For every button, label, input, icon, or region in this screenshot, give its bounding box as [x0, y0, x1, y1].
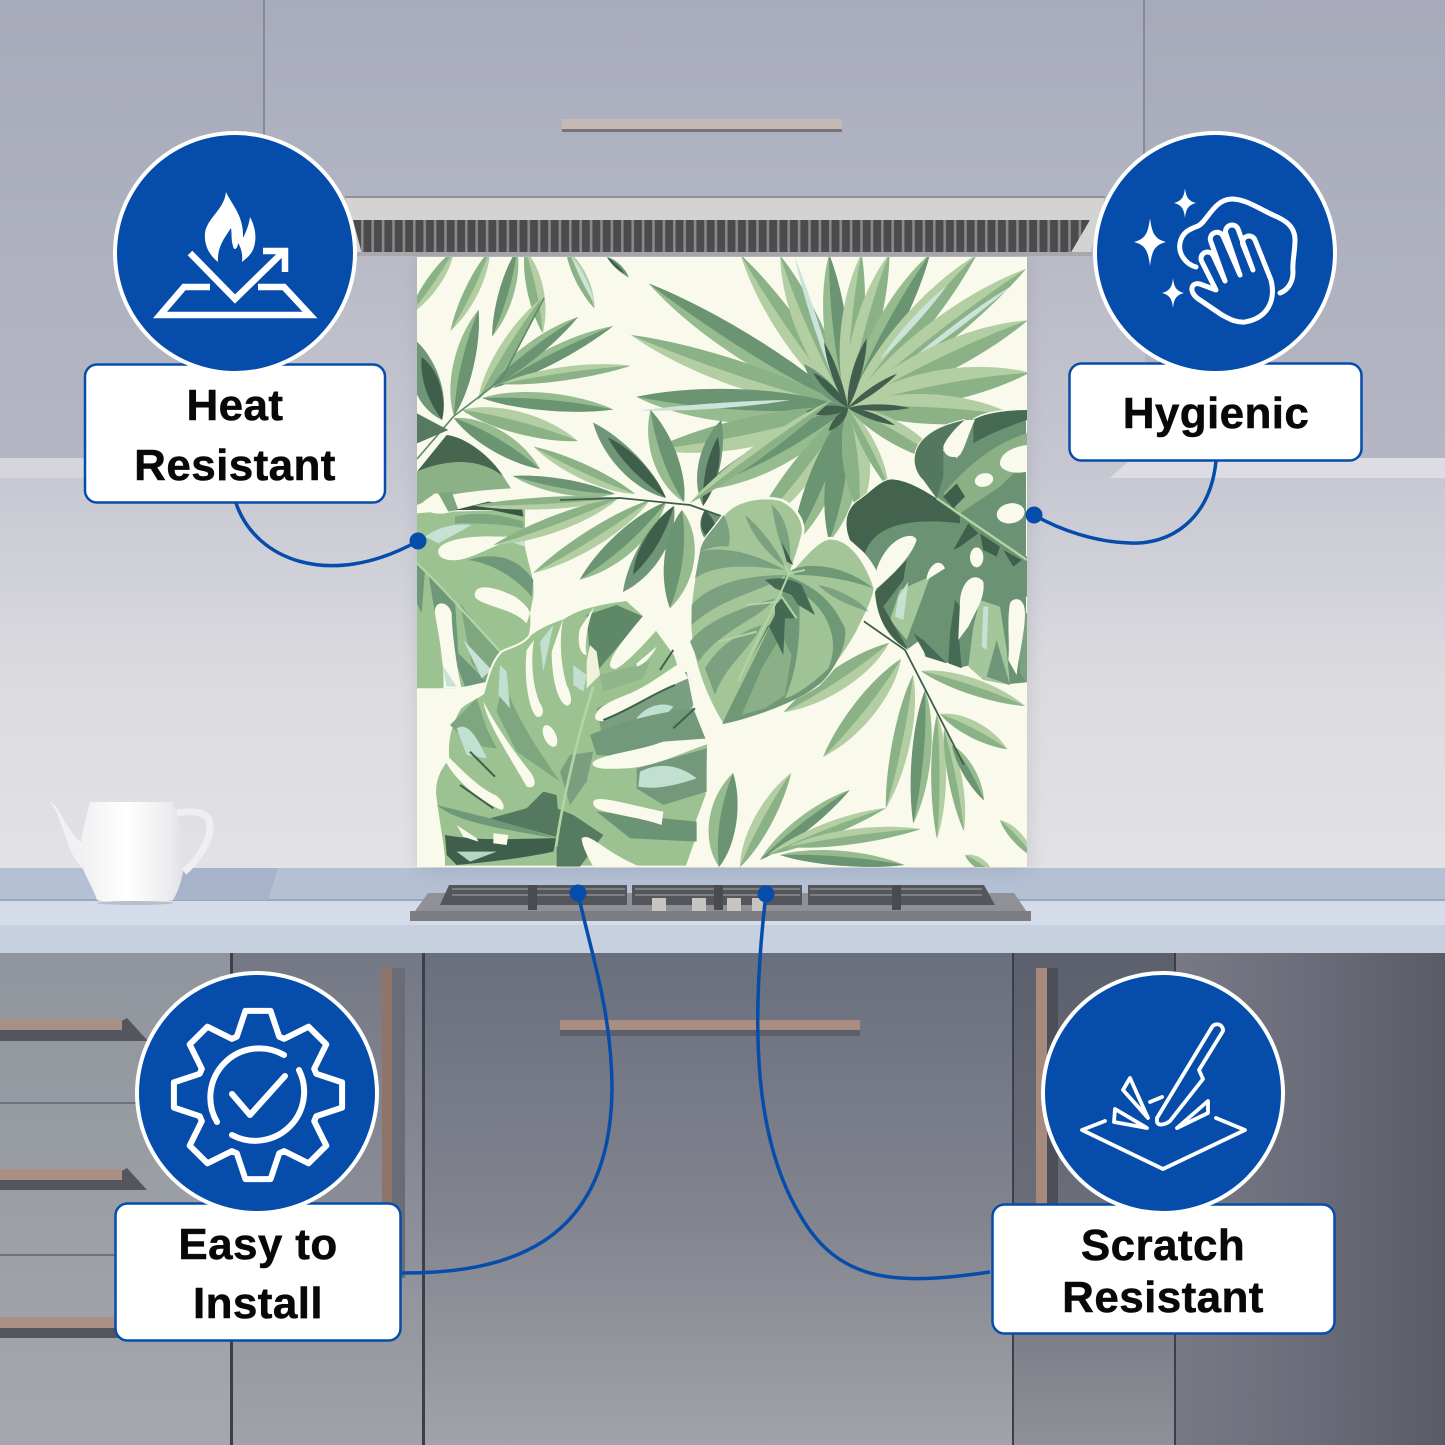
label: hygienic: Hygienic	[1123, 389, 1309, 438]
extractor hood	[345, 197, 1105, 255]
label: scratch resistant: Scratch	[1081, 1221, 1245, 1270]
label: easy to install	[116, 1204, 400, 1340]
counter	[0, 868, 1445, 900]
holes and slits	[875, 420, 1027, 675]
connector: scratch resistant	[758, 886, 990, 1279]
connector: hygienic	[1026, 461, 1216, 543]
connector: easy to install	[402, 884, 612, 1273]
teapot	[50, 802, 278, 905]
icon: easy to install	[135, 971, 379, 1215]
label: easy to install: Easy to	[178, 1220, 338, 1269]
label: heat resistant	[85, 364, 385, 502]
label: scratch resistant	[992, 1204, 1334, 1334]
monstera leaf: right	[847, 410, 1027, 685]
door handles	[392, 968, 405, 1278]
cabinet handle	[562, 119, 842, 129]
top left hanging blades	[417, 257, 629, 336]
lower cabinets	[0, 953, 232, 1445]
tropical leaf splashback panel	[401, 245, 1038, 879]
palm frond: bottom	[708, 773, 1027, 867]
slits	[445, 606, 708, 867]
wall	[0, 478, 1445, 870]
fan palm	[631, 257, 1027, 537]
palm frond: top left	[417, 298, 630, 469]
label: heat resistant: Resistant	[134, 441, 336, 490]
upper cabinet left	[0, 0, 263, 458]
monstera leaf: bottom left	[435, 600, 708, 867]
connector: heat resistant	[236, 503, 426, 566]
icon: scratch resistant	[1041, 971, 1285, 1215]
label: heat resistant: Heat	[187, 381, 283, 430]
label: scratch resistant: Resistant	[1062, 1273, 1264, 1322]
palm frond: bottom right	[779, 620, 1028, 839]
panel shadow	[416, 257, 1030, 873]
monstera leaf: left	[417, 413, 534, 688]
palm frond: centre	[474, 393, 835, 610]
upper cabinet right	[1145, 0, 1445, 458]
drawer handles	[0, 1018, 147, 1041]
upper cabinet centre	[265, 0, 1143, 197]
icon: heat resistant	[113, 131, 357, 375]
gas hob	[410, 885, 1031, 921]
label: hygienic	[1070, 364, 1362, 460]
icon: hygienic	[1093, 131, 1337, 375]
label: easy to install: Install	[193, 1279, 323, 1328]
shelf strips	[0, 458, 135, 478]
heart leaf	[690, 498, 875, 724]
